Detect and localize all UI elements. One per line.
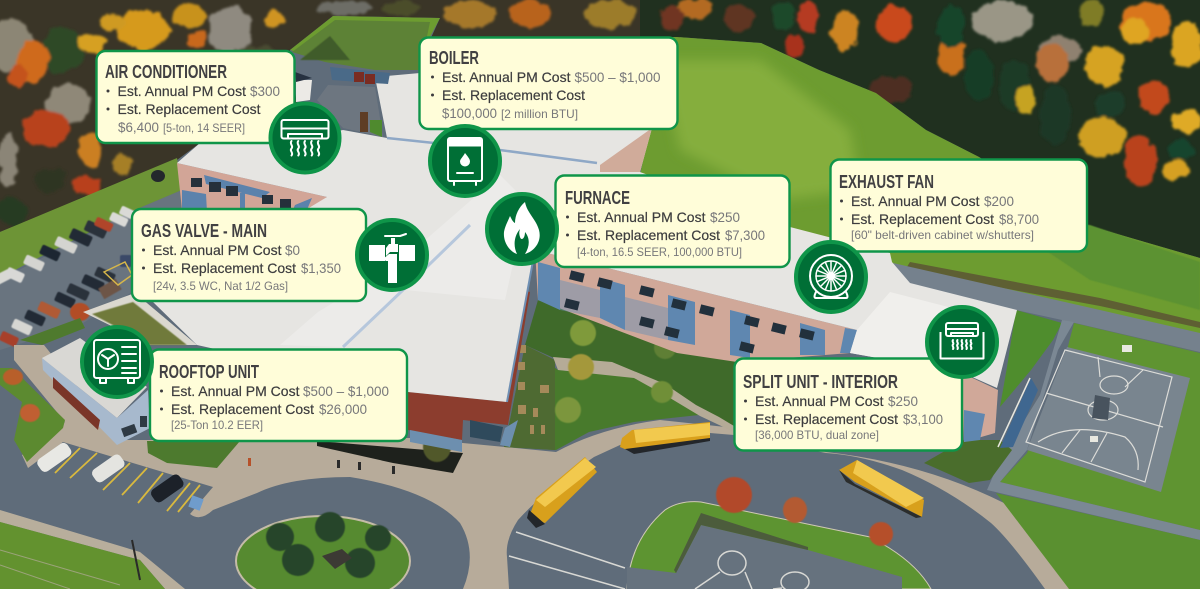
cost list: split unit interior: Est. Annual PM Cost (755, 393, 884, 409)
cost list: gas valve main: [24v, 3.5 WC, Nat 1/2 Gas] (153, 279, 288, 293)
building: roofs (42, 73, 1017, 418)
icon: air conditioner (270, 104, 340, 172)
lamp post (132, 540, 140, 580)
school bus: right (839, 460, 924, 518)
cost list: boiler: $500 – $1,000 (574, 69, 661, 85)
panel: exhaust fan (796, 160, 1087, 312)
panel: rooftop unit (82, 327, 407, 441)
heading: exhaust fan: EXHAUST FAN (839, 172, 934, 192)
heading: split unit interior: SPLIT UNIT - INTERIOR (743, 372, 898, 392)
cost list: split unit interior (744, 393, 943, 442)
service lot, dumpsters and small building (295, 67, 390, 137)
basketball court (1026, 345, 1190, 492)
icon: flame (487, 194, 557, 264)
lawn and sidewalk: bottom-left corner (0, 510, 185, 589)
cost list: exhaust fan: $8,700 (999, 211, 1039, 227)
heading: gas valve main: GAS VALVE - MAIN (141, 221, 267, 241)
cost list: gas valve main: $0 (285, 242, 300, 258)
cost list: boiler: [2 million BTU] (501, 107, 578, 121)
cost list: furnace: Est. Annual PM Cost (577, 209, 706, 225)
cost list: gas valve main: $1,350 (301, 260, 341, 276)
cost list: air conditioner: $6,400 (118, 119, 159, 135)
cost list: exhaust fan: Est. Annual PM Cost (851, 193, 980, 209)
heading: rooftop unit: ROOFTOP UNIT (159, 362, 259, 382)
icon: rooftop unit (82, 327, 152, 397)
cost list: exhaust fan (840, 193, 1039, 242)
lawn, roads and paths: right side (893, 263, 1200, 589)
icon: gas valve (357, 220, 427, 290)
panel: split unit interior (734, 307, 997, 450)
heading: boiler: BOILER (429, 48, 479, 68)
cost list: gas valve main (142, 242, 341, 293)
icon: split unit (927, 307, 997, 377)
cost list: split unit interior: [36,000 BTU, dual zone] (755, 428, 879, 442)
cost list: split unit interior: $3,100 (903, 411, 943, 427)
cost list: furnace: Est. Replacement Cost (577, 227, 720, 243)
heading: furnace: FURNACE (565, 188, 630, 208)
cost list: furnace (566, 209, 765, 259)
cost list: exhaust fan: $200 (984, 193, 1014, 209)
forest: left and top strip (0, 0, 680, 232)
parking row with cars (35, 441, 204, 512)
cost list: air conditioner (106, 83, 280, 135)
courtyard lawn, path and picnic tables (504, 300, 737, 450)
cost list: air conditioner: $300 (250, 83, 280, 99)
cost list: furnace: $7,300 (725, 227, 765, 243)
shrub beds at entrance (147, 432, 463, 474)
icon: exhaust fan (796, 242, 866, 312)
lawn: lower-left patch with shrubs (0, 368, 65, 462)
cost list: furnace: [4-ton, 16.5 SEER, 100,000 BTU] (577, 245, 742, 259)
panel: air conditioner (96, 51, 340, 172)
cost list: rooftop unit: Est. Replacement Cost (171, 401, 314, 417)
heading: air conditioner: AIR CONDITIONER (105, 62, 227, 82)
panel: gas valve main (132, 209, 427, 301)
cost list: boiler: Est. Annual PM Cost (442, 69, 571, 85)
cost list: split unit interior: Est. Replacement Cost (755, 411, 898, 427)
cost list: rooftop unit (160, 383, 389, 432)
cost list: exhaust fan: Est. Replacement Cost (851, 211, 994, 227)
cost list: split unit interior: $250 (888, 393, 918, 409)
icon: boiler (430, 126, 500, 196)
tan walkway around lower-left wing (14, 345, 1069, 589)
cost list: rooftop unit: $26,000 (319, 401, 367, 417)
panel: boiler (420, 38, 678, 196)
grass field: upper centre (290, 16, 1200, 352)
cost list: rooftop unit: $500 – $1,000 (303, 383, 389, 399)
cost list: air conditioner: Est. Annual PM Cost (118, 83, 246, 99)
grass: left slope (0, 158, 182, 278)
cost list: exhaust fan: [60" belt-driven cabinet w/shutters] (851, 228, 1034, 242)
cost list: boiler: Est. Replacement Cost (442, 87, 585, 103)
cost list: furnace: $250 (710, 209, 740, 225)
forest: right (640, 0, 1200, 258)
cost list: air conditioner: Est. Replacement Cost (118, 101, 261, 117)
school bus: left (527, 457, 597, 528)
cost list: air conditioner: [5-ton, 14 SEER] (163, 121, 245, 135)
building: facades (42, 163, 998, 452)
parking lot (0, 170, 185, 350)
bus loop grass island with court (509, 477, 931, 589)
school bus: top centre (620, 422, 710, 454)
cost list: gas valve main: Est. Replacement Cost (153, 260, 296, 276)
cost list: boiler: $100,000 (442, 105, 497, 121)
cost list: boiler (431, 69, 661, 121)
panel: furnace (487, 176, 790, 267)
cost list: rooftop unit: Est. Annual PM Cost (171, 383, 300, 399)
driveway circle island with trees (236, 512, 410, 589)
cost list: gas valve main: Est. Annual PM Cost (153, 242, 282, 258)
cost list: rooftop unit: [25-Ton 10.2 EER] (171, 418, 263, 432)
